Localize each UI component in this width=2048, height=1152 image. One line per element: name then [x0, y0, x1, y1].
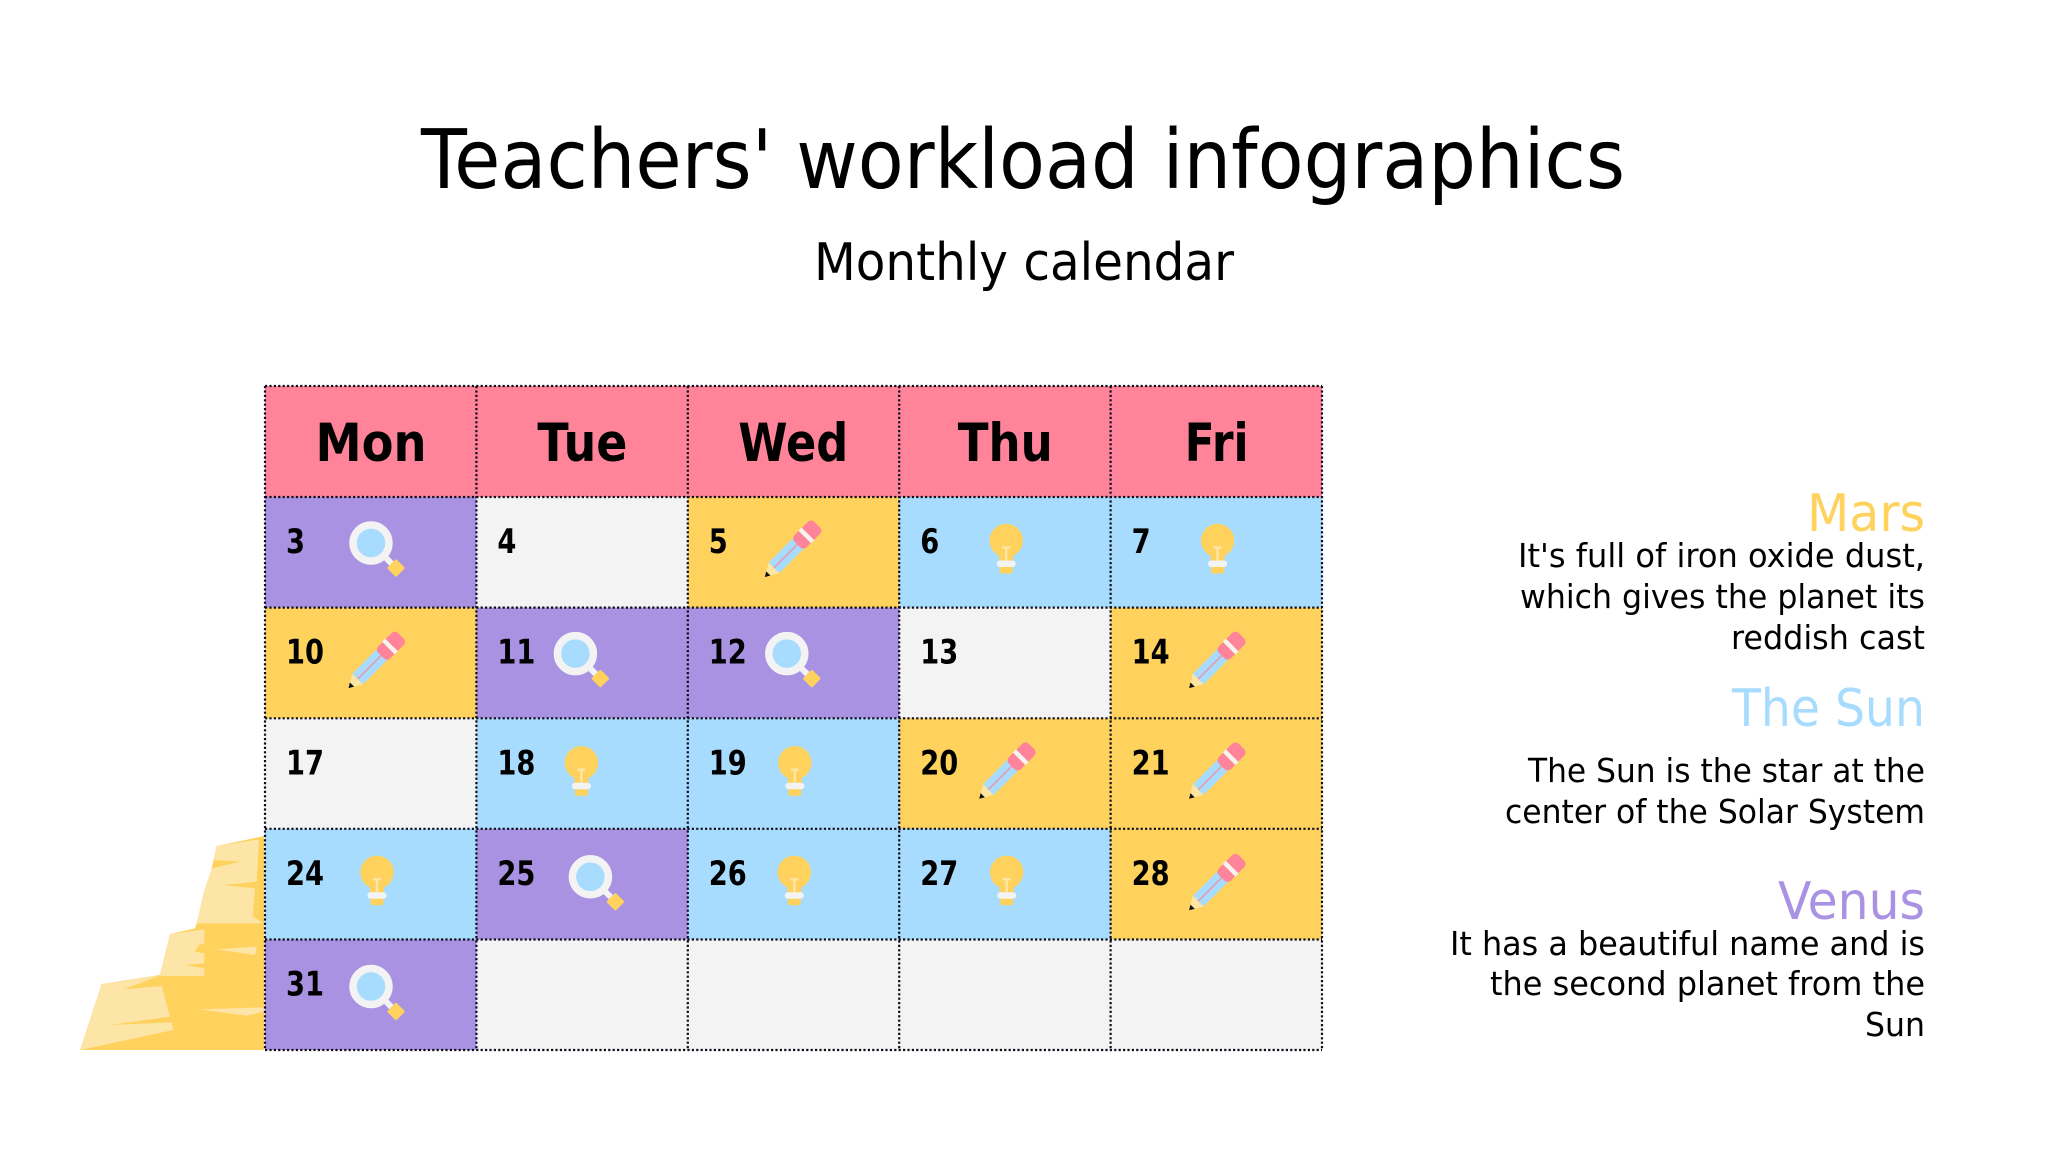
cell: 7: 7 — [1132, 522, 1151, 561]
legend: Mars — [1518, 484, 1925, 657]
header: Mon: Mon — [316, 413, 426, 474]
cell: 14: 14 — [1132, 633, 1170, 672]
text: Mars description — [1518, 536, 1925, 657]
cell: 17 — [265, 718, 476, 829]
cell: 26 — [688, 829, 899, 940]
cell: 10: 10 — [286, 633, 324, 672]
title: Teachers' workload infographics — [420, 113, 1625, 208]
cell: 12: 12 — [709, 633, 747, 672]
text: The Sun description: center of the Solar System — [1505, 792, 1925, 831]
text: The Sun description: The Sun is the star at the — [1527, 751, 1925, 790]
cell: 3 — [265, 497, 476, 608]
cell: 24 — [265, 829, 476, 940]
cell: 24: 24 — [286, 854, 324, 893]
header: Tue — [476, 386, 688, 497]
cell: 14 — [1111, 608, 1322, 718]
cell: 25 — [476, 829, 688, 940]
text: Venus description: Sun — [1865, 1005, 1925, 1044]
cell: 11: 11 — [497, 633, 535, 672]
header: Tue: Tue — [537, 413, 627, 474]
legend: Venus — [1450, 872, 1925, 1044]
calendar table — [265, 386, 1322, 1050]
cell: 25: 25 — [497, 854, 535, 893]
cell: 21 — [1111, 718, 1322, 829]
text: Mars description: It's full of iron oxide dust, — [1518, 536, 1925, 575]
cell: 6 — [899, 497, 1111, 608]
cell: 13 — [899, 608, 1111, 718]
cell: 18 — [476, 718, 688, 829]
cell: 31 — [265, 940, 476, 1050]
header: Wed: Wed — [738, 413, 848, 474]
illustration: stack of yellow rocks — [80, 836, 264, 1050]
cell: 21: 21 — [1132, 743, 1170, 782]
cell: 27 — [899, 829, 1111, 940]
text: Mars description: reddish cast — [1731, 618, 1925, 657]
cell: 19: 19 — [709, 743, 747, 782]
cell: 7 — [1111, 497, 1322, 608]
heading: Mars: Mars — [1807, 484, 1925, 544]
text: Venus description: It has a beautiful name and is — [1450, 924, 1925, 963]
cell: 10 — [265, 608, 476, 718]
cell: 28 — [1111, 829, 1322, 940]
cell: 13: 13 — [920, 633, 958, 672]
header: Thu — [899, 386, 1111, 497]
cell: 19 — [688, 718, 899, 829]
cell: 17: 17 — [286, 743, 324, 782]
cell: 20 — [899, 718, 1111, 829]
cell: 28: 28 — [1132, 854, 1170, 893]
header: Mon — [265, 386, 476, 497]
heading: The Sun: The Sun — [1731, 679, 1925, 739]
header: Wed — [688, 386, 899, 497]
text: Mars description: which gives the planet its — [1520, 577, 1925, 616]
cell: 31: 31 — [286, 964, 324, 1004]
text: Venus description: the second planet from the — [1490, 964, 1925, 1003]
heading: Venus: Venus — [1778, 872, 1925, 932]
cell: 4 — [476, 497, 688, 608]
text: The Sun description — [1505, 751, 1925, 831]
header: Fri: Fri — [1185, 413, 1249, 474]
empty cells — [476, 940, 1322, 1050]
cell: 26: 26 — [709, 854, 747, 893]
cell: 6: 6 — [920, 522, 939, 561]
cell: 27: 27 — [920, 854, 958, 893]
cell: 3: 3 — [286, 522, 305, 561]
cell: 12 — [688, 608, 899, 718]
cell: 20: 20 — [920, 743, 958, 782]
cell: 5 — [688, 497, 899, 608]
cell: 5: 5 — [709, 522, 728, 561]
cell: 4: 4 — [497, 522, 516, 561]
subtitle: Monthly calendar — [814, 233, 1235, 293]
text: Venus description — [1450, 924, 1925, 1044]
header: Thu: Thu — [958, 413, 1053, 474]
cell: 18: 18 — [497, 743, 535, 782]
cell: 11 — [476, 608, 688, 718]
legend: The Sun — [1505, 679, 1925, 831]
header: Fri — [1111, 386, 1322, 497]
